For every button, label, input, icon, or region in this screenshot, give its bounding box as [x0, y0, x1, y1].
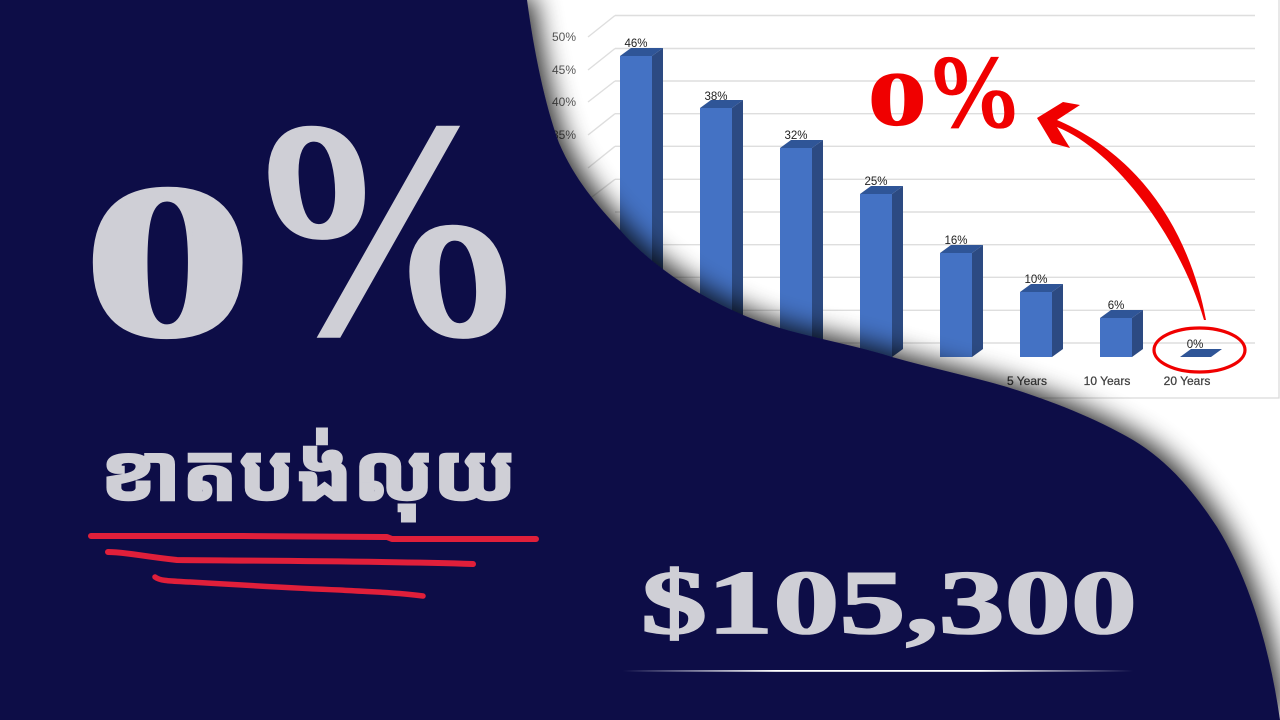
- big heading: 0%: %: [217, 56, 552, 402]
- bar: 25%: 25%: [864, 176, 888, 188]
- bar: 32%: [780, 130, 823, 357]
- bar: 16%: 16%: [944, 235, 968, 247]
- x axis labels: 10 Years: [1084, 374, 1130, 388]
- red curved arrow: [1037, 102, 1206, 320]
- Khmer heading: ខាតបង់លុយ: [100, 428, 517, 522]
- bar: 6%: [1100, 300, 1143, 357]
- bar: 0%: 0%: [1187, 339, 1203, 351]
- bar: 10%: 10%: [1024, 274, 1048, 286]
- x axis labels: 5 Years: [1007, 374, 1047, 388]
- red circle around 0% bar: [1154, 328, 1245, 372]
- bar: 38%: 38%: [704, 91, 728, 103]
- red heading: 0%: %: [917, 33, 1030, 150]
- bar: 6%: 6%: [1108, 300, 1124, 312]
- bar: 32%: 32%: [784, 130, 808, 142]
- bar: 25%: [860, 176, 903, 357]
- amount: $105,300: $105,300: [641, 552, 1137, 653]
- y axis labels: 35%: [552, 128, 576, 142]
- bar: 46%: [620, 38, 663, 357]
- red heading: 0%: [868, 33, 1030, 150]
- big heading: 0%: 0: [83, 139, 252, 383]
- x axis labels: 20 Years: [1164, 374, 1210, 388]
- bar: 38%: [700, 91, 743, 357]
- y axis labels: 45%: [552, 63, 576, 77]
- bar: 10%: [1020, 274, 1063, 357]
- y axis labels: 50%: [552, 30, 576, 44]
- bar: 0%: [1180, 339, 1222, 357]
- y axis labels: 40%: [552, 95, 576, 109]
- red hand-drawn underlines: [91, 536, 536, 596]
- y axis labels: [552, 30, 576, 142]
- bar: 46%: 46%: [624, 38, 648, 50]
- x axis labels: [1007, 374, 1210, 388]
- thin line under amount: [623, 670, 1133, 672]
- red heading: 0%: 0: [868, 58, 927, 142]
- bar: 16%: [940, 235, 983, 357]
